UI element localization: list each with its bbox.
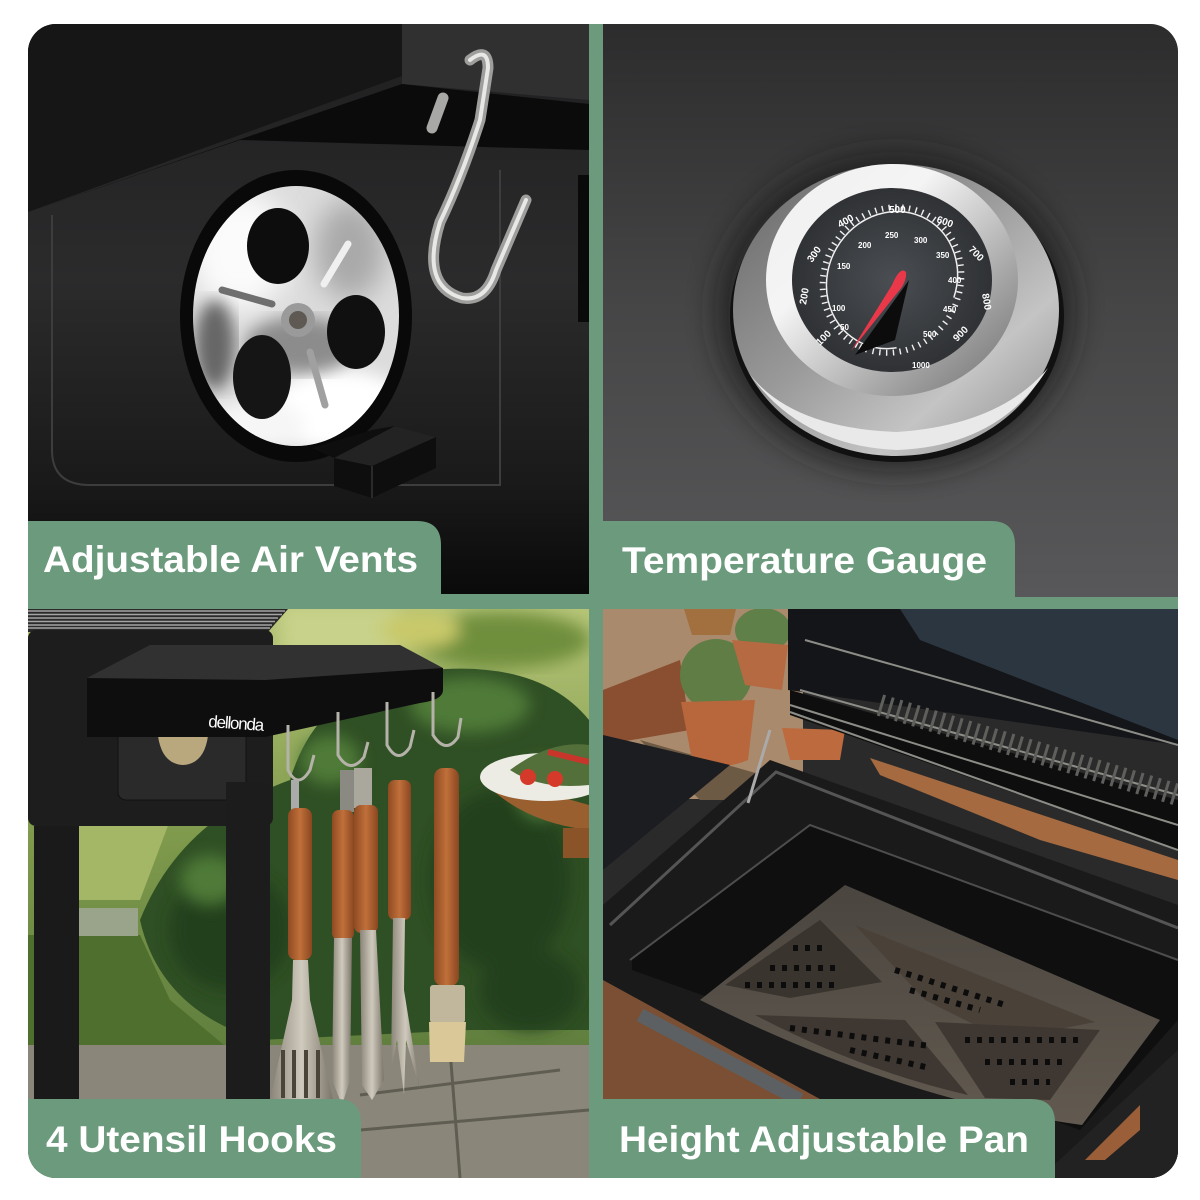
lid overhang xyxy=(28,24,402,212)
dial numbers: 450 xyxy=(943,305,957,314)
dial numbers: 800 xyxy=(979,293,993,311)
needle xyxy=(855,280,909,355)
label: adjustable air vents: Adjustable Air Vents xyxy=(43,539,418,580)
probe xyxy=(748,730,770,803)
dial numbers: 100 xyxy=(814,328,834,348)
patio xyxy=(28,1045,589,1178)
table with food plate xyxy=(480,778,589,830)
hedge xyxy=(140,669,589,1040)
side shelf xyxy=(88,645,443,680)
dial numbers: 250 xyxy=(885,231,899,240)
dial numbers: 500 xyxy=(923,330,937,339)
dial numbers: 200 xyxy=(798,287,812,306)
vent disc xyxy=(190,180,410,450)
warming rack xyxy=(790,690,1178,850)
dial numbers: 100 xyxy=(832,304,846,313)
label: 4 utensil hooks: 4 Utensil Hooks xyxy=(46,1119,337,1160)
grill grate xyxy=(28,609,288,632)
panel: utensil hooks xyxy=(28,605,610,1178)
label: height adjustable pan: Height Adjustable Pan xyxy=(619,1119,1029,1160)
label: 4 utensil hooks xyxy=(28,1099,361,1178)
patio and plants xyxy=(603,609,803,799)
panel: adjustable air vents xyxy=(28,24,589,594)
label: temperature gauge xyxy=(603,521,1015,597)
dial numbers: 500 xyxy=(889,205,906,216)
gauge recess shadow xyxy=(715,152,1075,472)
grill body xyxy=(28,630,273,826)
lid interior xyxy=(788,609,1178,745)
dial numbers: 400 xyxy=(948,276,962,285)
dial numbers: 50 xyxy=(840,323,849,332)
vent handle xyxy=(330,426,436,498)
dial numbers: 700 xyxy=(966,244,986,264)
embossed panel line xyxy=(52,170,500,485)
dial numbers: 1000 xyxy=(912,361,930,370)
panel: height adjustable pan xyxy=(603,608,1178,1178)
dial numbers: 600 xyxy=(935,214,955,231)
brand logo: dellonda xyxy=(208,712,265,735)
dial numbers: 300 xyxy=(805,244,824,265)
dial numbers: 350 xyxy=(936,251,950,260)
dial ticks xyxy=(820,204,964,356)
grill front and wood side xyxy=(603,980,820,1099)
temperature gauge xyxy=(730,164,1064,462)
dial numbers: 200 xyxy=(858,241,872,250)
label: height adjustable pan xyxy=(603,1099,1055,1178)
label: adjustable air vents xyxy=(28,521,441,594)
panel: temperature gauge xyxy=(603,24,1178,597)
S hook xyxy=(432,98,443,128)
dial numbers xyxy=(798,205,993,370)
dial numbers: 900 xyxy=(951,324,971,344)
firebox xyxy=(603,735,730,870)
dial numbers: 300 xyxy=(914,236,928,245)
dial numbers: 400 xyxy=(836,213,856,231)
hooks and tools xyxy=(288,692,461,780)
brick view through xyxy=(870,758,1178,880)
charcoal pan xyxy=(700,885,1160,1125)
label: temperature gauge: Temperature Gauge xyxy=(622,540,987,581)
vent socket xyxy=(180,170,412,462)
dial numbers: 150 xyxy=(837,262,851,271)
